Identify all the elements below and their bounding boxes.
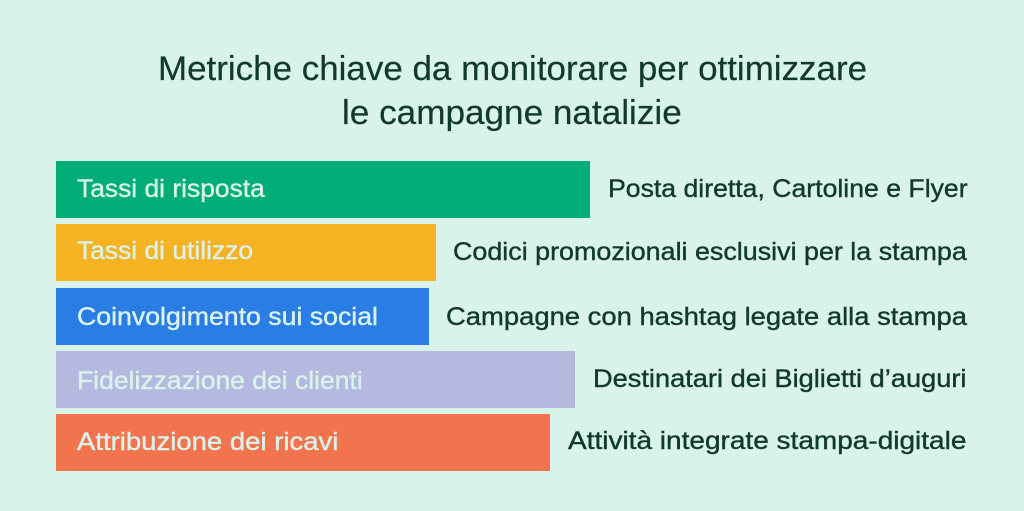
bar: Tassi di utilizzo xyxy=(56,224,436,281)
bar: Fidelizzazione dei clienti: Fidelizzazione dei clienti xyxy=(77,367,363,395)
description: Posta diretta: Posta diretta, Cartoline e Flyer xyxy=(608,175,968,203)
bar: Attribuzione dei ricavi xyxy=(56,414,550,471)
description: Codici promozionali: Codici promozionali esclusivi per la stampa xyxy=(453,238,967,266)
title: le campagne natalizie xyxy=(342,94,682,132)
bar: Coinvolgimento sui social xyxy=(56,288,429,345)
bar: Fidelizzazione dei clienti xyxy=(56,351,575,408)
bar: Tassi di utilizzo: Tassi di utilizzo xyxy=(77,237,253,265)
description: Destinatari: Destinatari dei Biglietti d’auguri xyxy=(593,365,966,393)
description: Campagne con hashtag: Campagne con hashtag legate alla stampa xyxy=(446,303,967,331)
description: Attività integrate: Attività integrate stampa-digitale xyxy=(568,427,966,455)
bar: Tassi di risposta: Tassi di risposta xyxy=(77,175,265,203)
title xyxy=(158,50,867,132)
bar: Attribuzione dei ricavi: Attribuzione dei ricavi xyxy=(77,428,338,456)
bar: Coinvolgimento sui social: Coinvolgimento sui social xyxy=(77,303,378,331)
title: Metriche chiave da monitorare per ottimizzare xyxy=(158,50,867,88)
bar: Tassi di risposta xyxy=(56,161,590,218)
